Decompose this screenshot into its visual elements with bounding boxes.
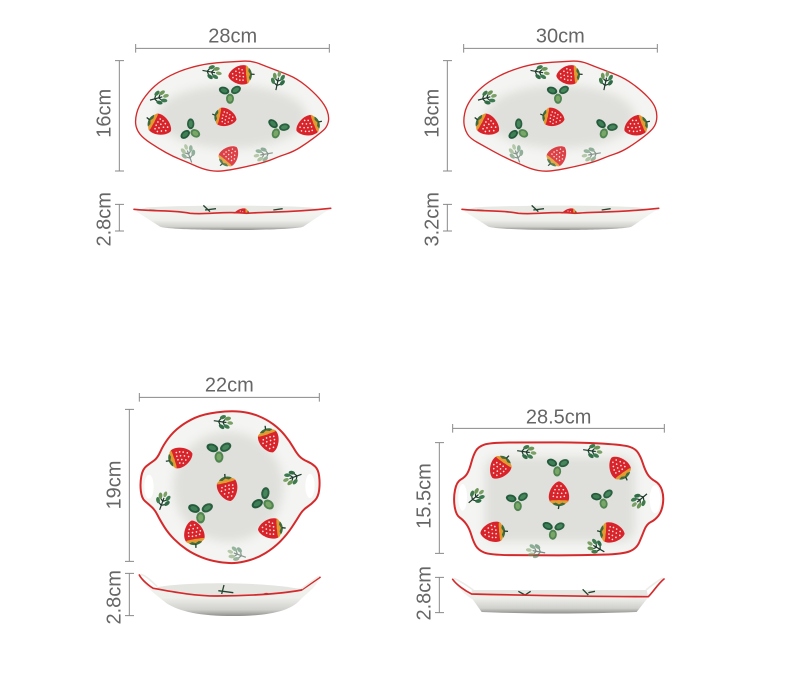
plate top view	[454, 442, 663, 561]
panel: round handled plate 22cm	[104, 375, 320, 625]
handle holes	[144, 474, 315, 499]
dimension: height 18cm	[422, 61, 452, 171]
dimension: width 22cm	[139, 375, 319, 402]
dimension: height 16cm	[94, 61, 124, 171]
plate side view	[453, 578, 664, 613]
dimension: width 28.5cm	[453, 406, 664, 433]
dimension: height 15.5cm: 15.5cm	[414, 463, 436, 529]
plate side view	[462, 205, 659, 230]
dimension: width 28cm	[136, 26, 329, 53]
dimension: width 22cm: 22cm	[205, 375, 254, 397]
dimension: height 15.5cm	[414, 443, 444, 553]
handle holes	[458, 484, 660, 513]
plate side view	[139, 574, 320, 616]
dimension: width 30cm	[464, 26, 657, 53]
dimension: thickness 2.8cm: 2.8cm	[414, 566, 436, 621]
plate top view	[141, 411, 320, 565]
dimension: height 19cm: 19cm	[104, 461, 126, 509]
dimension: height 19cm	[104, 409, 134, 561]
dimension: thickness 2.8cm: 2.8cm	[94, 192, 116, 247]
dimension: thickness 2.8cm: 2.8cm	[104, 570, 126, 625]
plate side view	[134, 205, 331, 230]
dimension: width 28.5cm: 28.5cm	[526, 406, 591, 428]
plate top view	[136, 61, 329, 172]
panel: oval plate 30cm	[422, 26, 659, 247]
dimension: height 16cm: 16cm	[94, 89, 116, 138]
panel: rectangular handled plate 28.5cm	[414, 406, 664, 621]
dimension: width 28cm: 28cm	[208, 26, 257, 48]
dimension: width 30cm: 30cm	[536, 26, 585, 48]
dimension: height 18cm: 18cm	[422, 89, 444, 138]
dimension: thickness 3.2cm: 3.2cm	[422, 192, 444, 247]
panel: oval plate 28cm	[94, 26, 331, 247]
plate top view	[464, 61, 657, 172]
